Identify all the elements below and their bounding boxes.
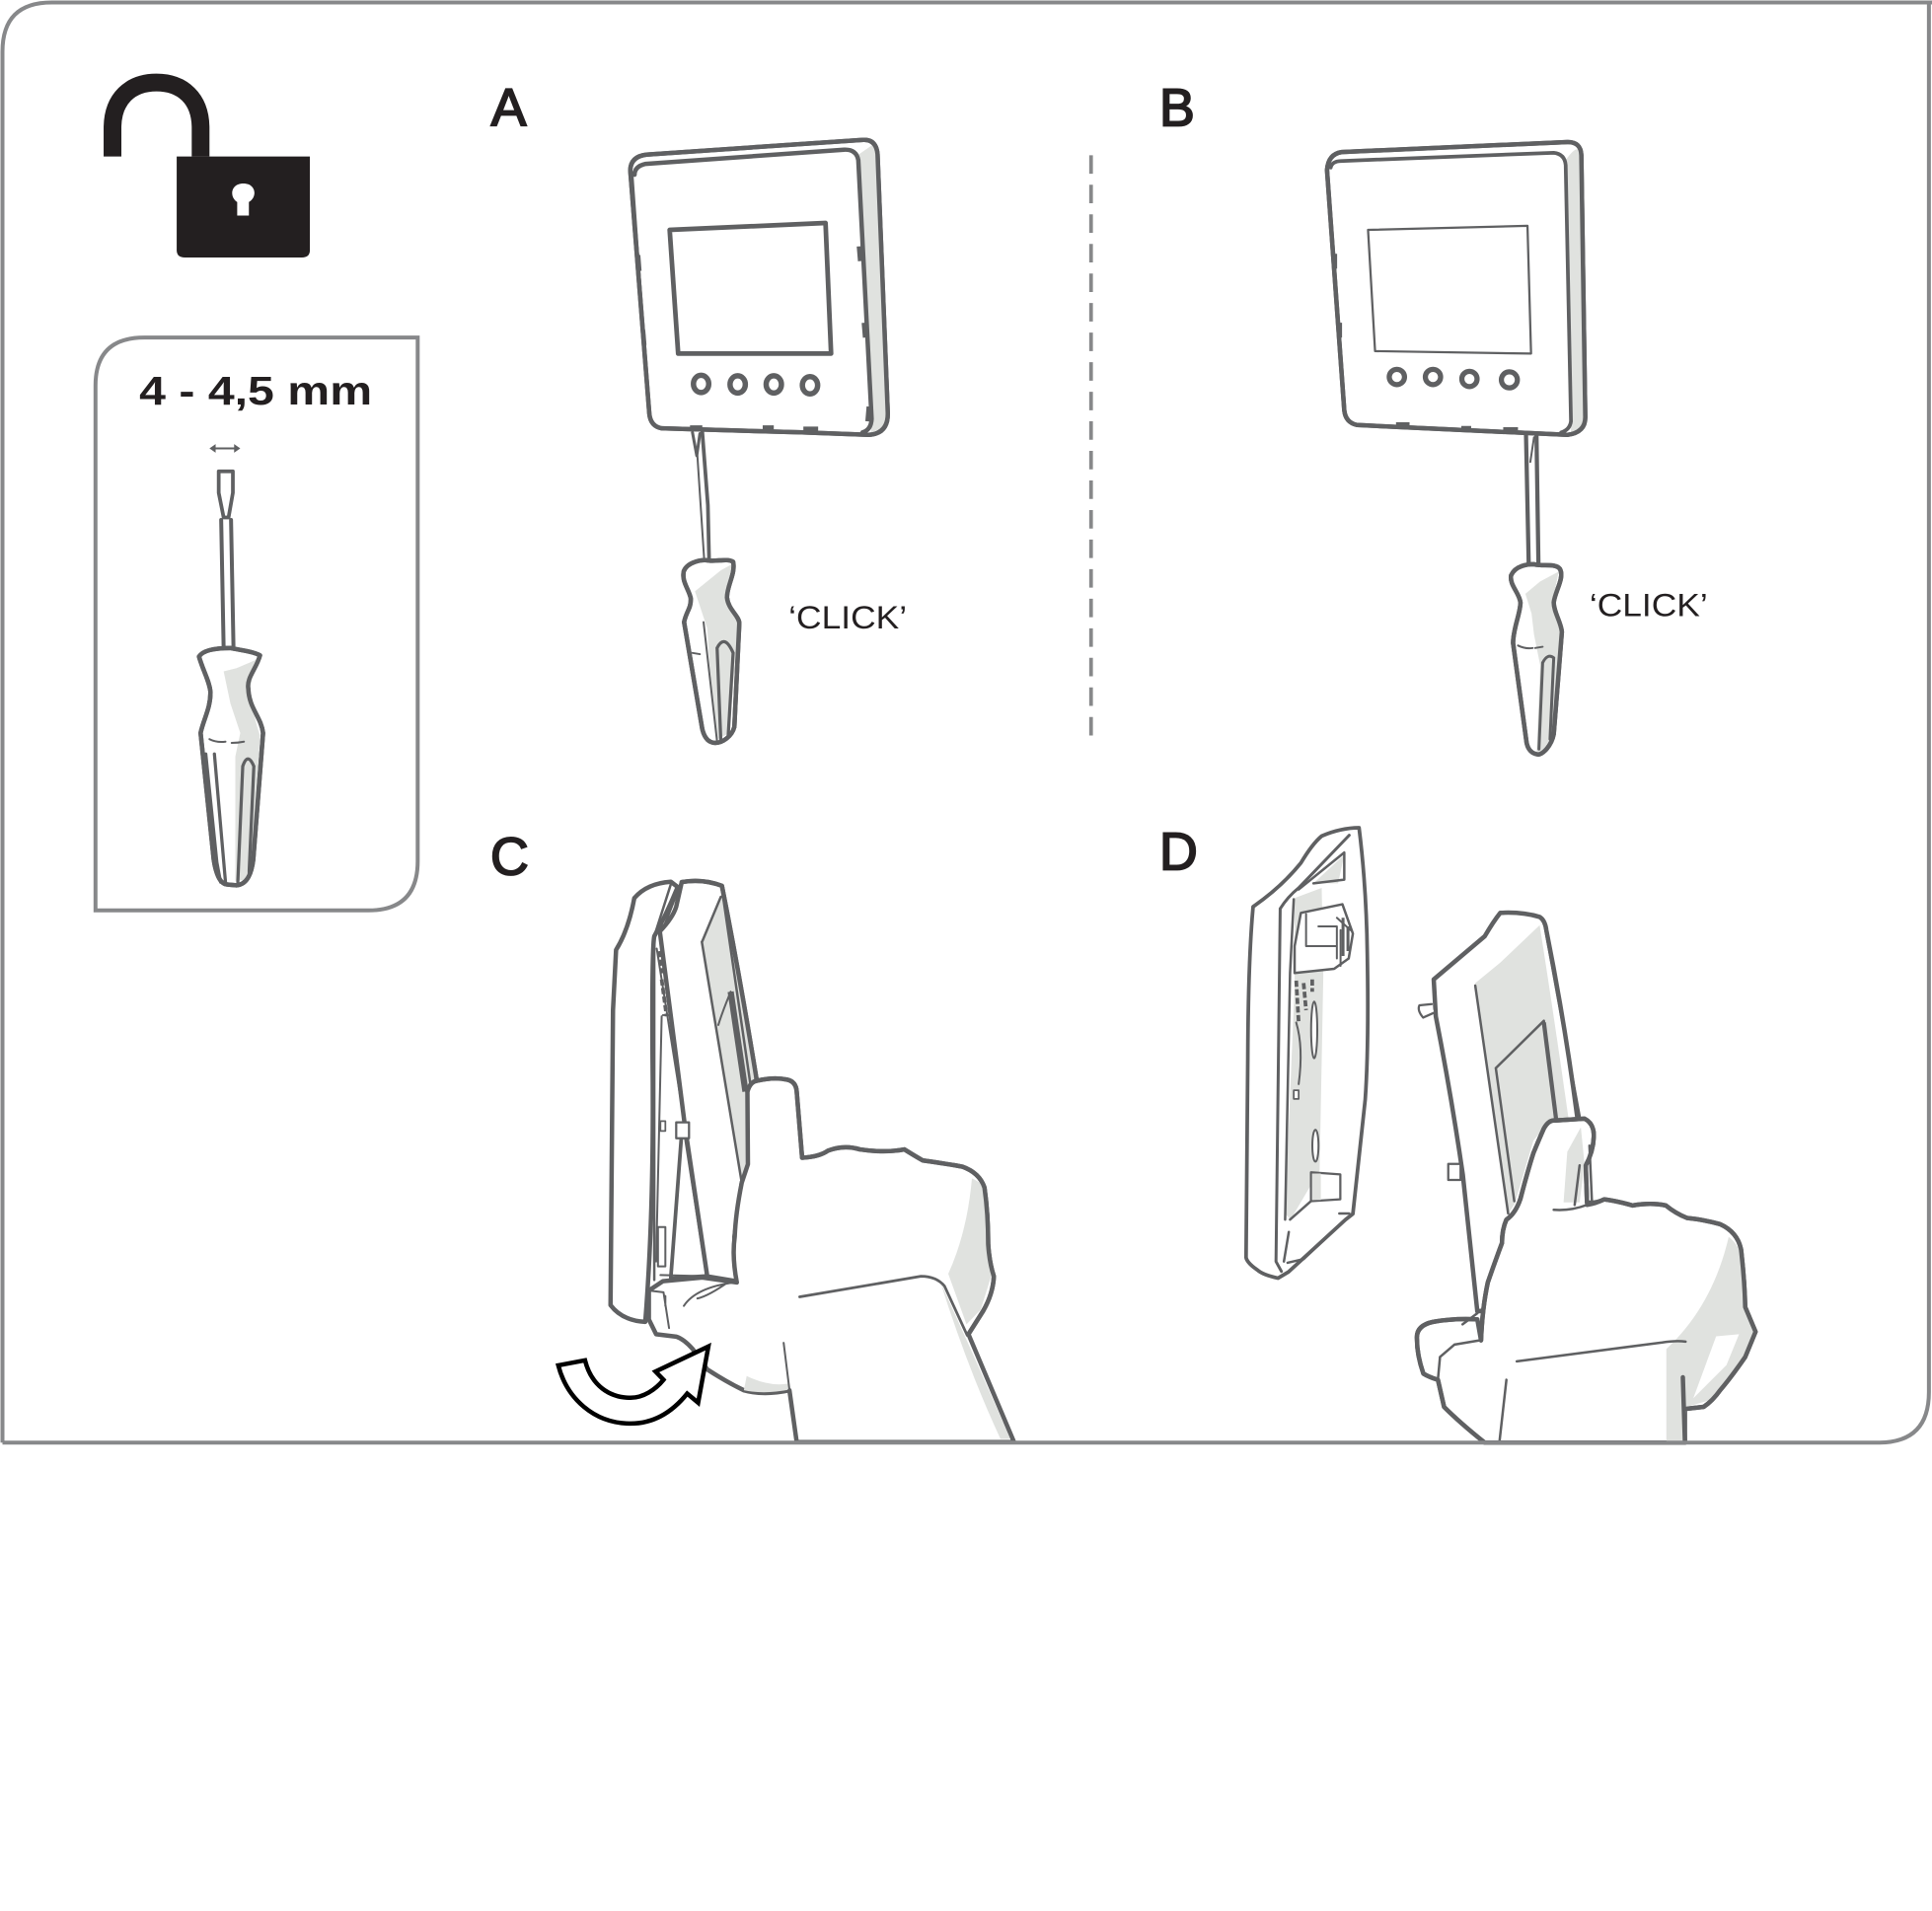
step A — [491, 78, 907, 743]
letter B: B — [1159, 78, 1195, 137]
screen — [1368, 226, 1531, 353]
connector block — [1295, 905, 1353, 973]
screwdriver — [199, 472, 263, 885]
hand — [649, 1078, 1014, 1442]
device: front view — [1327, 142, 1586, 435]
screen — [670, 223, 831, 353]
front cover — [660, 881, 757, 1282]
device: opening from base — [611, 881, 757, 1322]
arrow: rotate — [558, 1347, 708, 1424]
letter A: A — [491, 78, 527, 137]
size label: 4 - 4,5 mm — [139, 368, 372, 413]
divider — [1089, 155, 1092, 742]
icon: width arrow — [209, 444, 241, 453]
interior — [653, 937, 655, 1280]
click label: ‘CLICK’ — [788, 600, 907, 635]
panel: screwdriver size — [96, 337, 417, 911]
bottom bracket — [1311, 1172, 1340, 1201]
device: base plate — [1246, 828, 1368, 1279]
click label: ‘CLICK’ — [1590, 587, 1708, 623]
screwdriver — [1511, 435, 1562, 755]
base plate — [611, 882, 678, 1322]
icon: open padlock — [112, 83, 310, 257]
device: front cover — [1419, 913, 1587, 1311]
screwdriver — [684, 432, 739, 743]
hand — [1417, 1119, 1755, 1442]
step C — [490, 828, 1014, 1442]
letter D: D — [1159, 823, 1198, 882]
step B — [1159, 78, 1708, 755]
letter C: C — [490, 828, 529, 887]
step D — [1159, 823, 1755, 1442]
buttons — [694, 375, 818, 394]
device: front view — [631, 140, 888, 435]
buttons — [1389, 369, 1518, 388]
outer frame panel — [3, 2, 1932, 1442]
